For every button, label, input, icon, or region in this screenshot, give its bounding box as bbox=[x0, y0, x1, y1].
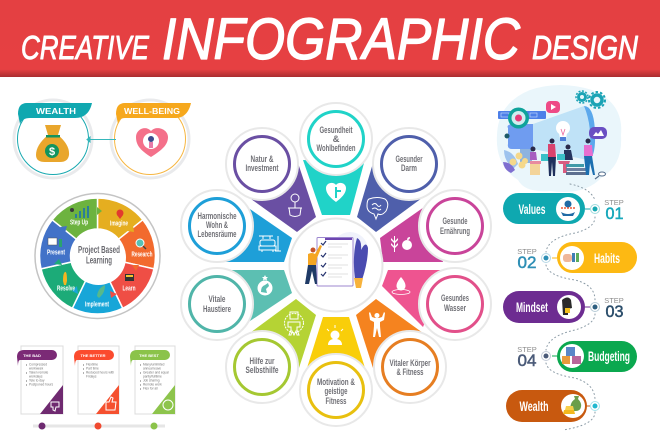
card: the bad: Postponed hours bbox=[29, 382, 54, 386]
center hub bbox=[71, 230, 126, 285]
card: the bad: Tele to day bbox=[29, 378, 45, 382]
step 1: values: Values bbox=[518, 201, 546, 217]
icon: motivation head bbox=[327, 325, 343, 345]
icon: budget blocks bbox=[562, 347, 581, 364]
icon: handshake bbox=[563, 253, 579, 262]
clipboard bbox=[317, 238, 353, 286]
panel: comparison cards bbox=[17, 346, 175, 430]
segment: imagine bbox=[98, 198, 143, 239]
target bbox=[508, 108, 529, 128]
node: darm bbox=[373, 128, 445, 200]
step marker bbox=[587, 402, 600, 410]
segment labels: Present bbox=[47, 250, 65, 256]
step 5: wealth bbox=[506, 390, 600, 422]
step 2: habits: Habits bbox=[594, 250, 620, 266]
node: selbsthilfe bbox=[226, 331, 298, 403]
step 1: values bbox=[503, 193, 624, 224]
card: the better: Part time bbox=[86, 366, 99, 370]
segment labels: Learn bbox=[122, 286, 136, 292]
step marker bbox=[542, 352, 557, 360]
title: creative: CREATIVE bbox=[21, 29, 150, 66]
node: wasser: Gesundes bbox=[441, 293, 469, 304]
segment labels: Implement bbox=[85, 302, 109, 308]
card: the bad: Taken remote bbox=[29, 370, 49, 374]
node: ernaehrung bbox=[419, 190, 491, 262]
petals bbox=[225, 160, 447, 368]
card: the best: Greater and equal bbox=[143, 370, 169, 374]
icon: gold and money bag bbox=[563, 396, 581, 414]
step 4: budgeting: 04 bbox=[518, 351, 536, 370]
node: koerper: & Fitness bbox=[396, 367, 424, 378]
chart: central petal diagram bbox=[181, 103, 491, 426]
team figures bbox=[530, 138, 595, 176]
dotted path bbox=[546, 184, 595, 430]
center hub bbox=[290, 218, 382, 312]
card: the better: Reduced hours with bbox=[86, 370, 114, 374]
center label: Project Based bbox=[78, 245, 120, 256]
icon: water drop bbox=[392, 277, 410, 294]
step 4: budgeting: Budgeting bbox=[588, 348, 630, 364]
well-being banner bbox=[116, 103, 191, 124]
node: gesundheit: Wohlbefinden bbox=[316, 143, 356, 154]
node: gesundheit: & bbox=[333, 134, 340, 145]
icon: grain and apple bbox=[391, 236, 412, 252]
node: gesundheit: Gesundheit bbox=[320, 125, 353, 136]
node: koerper bbox=[374, 331, 446, 403]
node: motivation: geistige bbox=[324, 386, 348, 397]
card: the best: annual leave bbox=[143, 366, 161, 370]
step 5: wealth: Wealth bbox=[520, 398, 548, 414]
card: the best: parity/fulltime bbox=[143, 374, 162, 378]
icon: gut bbox=[367, 198, 388, 219]
segment arrows bbox=[54, 207, 139, 298]
icon: investment plant bbox=[288, 194, 302, 216]
wealth banner bbox=[18, 103, 92, 124]
card: the better: THE BETTER bbox=[80, 353, 106, 358]
chart: project based learning wheel bbox=[35, 194, 160, 318]
checklist marks bbox=[321, 241, 326, 276]
segment labels bbox=[47, 220, 152, 308]
node: natur: Natur & bbox=[250, 154, 274, 165]
icon: heart bbox=[136, 128, 168, 157]
search bar bbox=[498, 111, 546, 119]
node: ernaehrung: Gesunde bbox=[442, 216, 468, 227]
step 1: values: 01 bbox=[606, 204, 624, 223]
megaphone bbox=[504, 106, 595, 163]
card: the best: THE BEST bbox=[139, 353, 159, 358]
node: haustiere: Vitale bbox=[208, 294, 226, 305]
card: the bad: workweek bbox=[29, 366, 44, 370]
segment icons bbox=[48, 206, 146, 298]
icon: room with sofa bbox=[259, 236, 281, 252]
panel: wealth and well-being bbox=[14, 100, 191, 178]
card: the bad: THE BAD bbox=[23, 353, 41, 358]
card: the better: Flextime bbox=[86, 362, 98, 366]
node: selbsthilfe: Selbsthilfe bbox=[246, 365, 278, 376]
timeline bbox=[33, 422, 165, 430]
title: design: DESIGN bbox=[532, 29, 638, 66]
magnifier bbox=[595, 172, 606, 179]
background blob bbox=[497, 85, 621, 192]
node: lebensraeume: Harmonische bbox=[198, 211, 236, 222]
icon: values hands bbox=[561, 200, 575, 216]
segment labels: Step Up bbox=[70, 220, 88, 226]
step 3: mindset bbox=[503, 291, 624, 323]
center label bbox=[78, 245, 120, 266]
card: the best: Job sharing bbox=[143, 378, 160, 382]
step 2: habits: STEP bbox=[517, 247, 537, 256]
segment labels: Research bbox=[132, 252, 152, 258]
wealth label: WEALTH bbox=[36, 107, 76, 116]
segment: resolve bbox=[41, 262, 86, 308]
well-being label: WELL-BEING bbox=[124, 107, 180, 116]
node: wasser bbox=[419, 268, 491, 340]
node: selbsthilfe: Hilfe zur bbox=[250, 356, 275, 367]
node: motivation: Motivation & bbox=[317, 377, 355, 388]
header banner bbox=[0, 0, 660, 77]
node: darm: Gesunder bbox=[396, 154, 423, 165]
node: ernaehrung: Ernährung bbox=[440, 226, 470, 237]
illustration: marketing team with megaphone bbox=[497, 85, 621, 192]
play bubble bbox=[546, 101, 560, 113]
node: natur: Investment bbox=[246, 163, 279, 174]
node: gesundheit bbox=[300, 103, 372, 175]
icon: pet bbox=[258, 275, 272, 296]
light bulb bbox=[556, 121, 570, 141]
node: motivation: Fitness bbox=[326, 396, 346, 407]
node: lebensraeume bbox=[181, 190, 253, 262]
step marker bbox=[542, 254, 557, 262]
node: darm: Darm bbox=[401, 163, 417, 174]
icon: muscle figure bbox=[369, 312, 385, 337]
step marker bbox=[585, 302, 600, 312]
person bbox=[310, 248, 316, 252]
card: the better: Fridays bbox=[86, 374, 97, 378]
card: the best: Remote work bbox=[143, 382, 162, 386]
segment labels: Imagine bbox=[110, 220, 128, 228]
icon: heart health bbox=[326, 183, 346, 202]
step 1: values: STEP bbox=[604, 198, 624, 207]
node: natur bbox=[226, 128, 298, 200]
node: wasser: Wasser bbox=[444, 303, 466, 314]
step 3: mindset: Mindset bbox=[516, 299, 548, 315]
segment: implement bbox=[72, 280, 123, 314]
node: lebensraeume: Wohn & bbox=[206, 220, 228, 231]
step 3: mindset: STEP bbox=[604, 296, 624, 305]
segment: step up bbox=[52, 198, 98, 239]
card: the bad: Compressed bbox=[29, 362, 47, 366]
card: the best: Many/unlimited bbox=[143, 362, 165, 366]
node: motivation bbox=[300, 354, 372, 426]
node: haustiere: Haustiere bbox=[203, 304, 231, 315]
step 2: habits: 02 bbox=[518, 253, 536, 272]
icon: mind head bbox=[562, 298, 572, 315]
icon: money bag bbox=[36, 125, 69, 162]
icon: self help figure bbox=[284, 312, 304, 335]
chart bubble bbox=[589, 127, 607, 139]
step 2: habits bbox=[517, 242, 637, 273]
segment: research bbox=[119, 220, 155, 269]
step marker bbox=[585, 204, 600, 214]
node: lebensraeume: Lebensräume bbox=[198, 229, 236, 240]
segment: present bbox=[40, 220, 76, 269]
step 4: budgeting bbox=[517, 341, 637, 372]
segment: learn bbox=[109, 262, 154, 308]
node: haustiere bbox=[181, 268, 253, 340]
card: the best bbox=[130, 346, 175, 414]
node: koerper: Vitaler Körper bbox=[390, 358, 431, 369]
card: the bad: workdays bbox=[29, 374, 43, 378]
segment labels: Resolve bbox=[57, 286, 75, 292]
gears bbox=[576, 91, 605, 108]
icon: money bag: $ bbox=[49, 146, 55, 158]
card: the bad bbox=[17, 346, 63, 414]
coins and leaves bbox=[503, 150, 528, 173]
step 3: mindset: 03 bbox=[606, 302, 624, 321]
illustration: checklist with person bbox=[305, 232, 368, 288]
card: the best: Flex for all bbox=[143, 386, 158, 390]
connector line bbox=[87, 137, 116, 142]
card: the better bbox=[74, 346, 119, 414]
title: infographic: INFOGRAPHIC bbox=[162, 7, 521, 72]
plant bbox=[354, 238, 368, 280]
center label: Learning bbox=[86, 256, 112, 266]
step 4: budgeting: STEP bbox=[517, 345, 537, 354]
